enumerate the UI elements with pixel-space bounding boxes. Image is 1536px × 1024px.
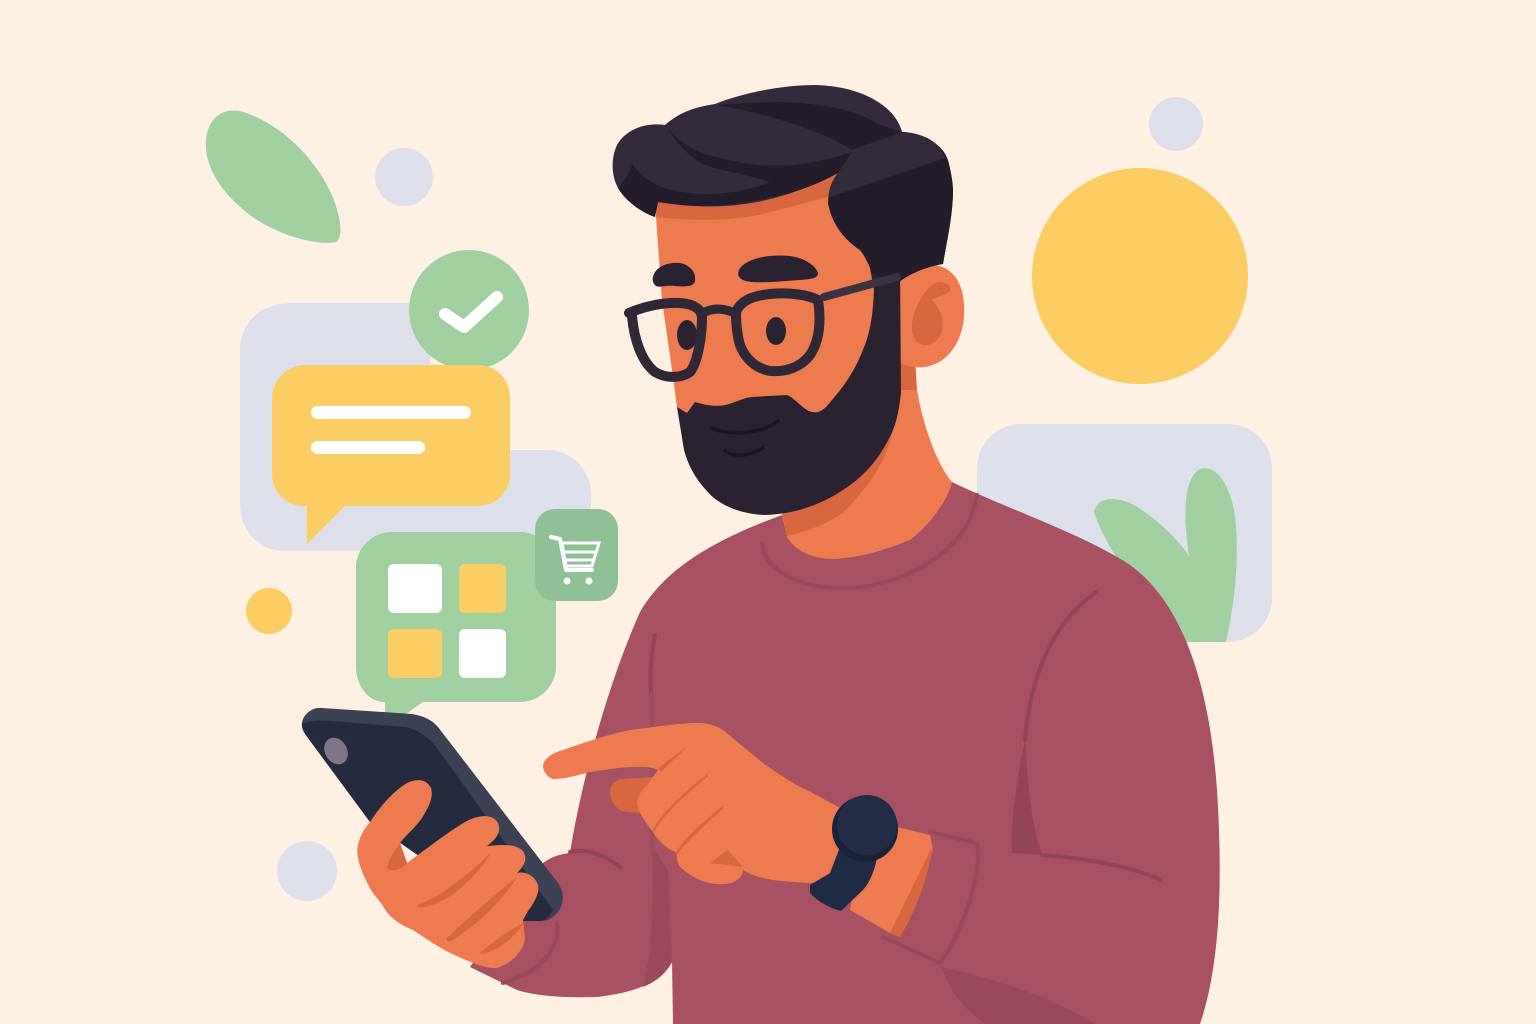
circle: lavender top right [1149, 97, 1203, 151]
pointing hand [543, 723, 845, 884]
panel: green app grid bubble [356, 532, 556, 716]
hair dark strands [618, 102, 953, 282]
panel: lavender back speech bubble [240, 303, 591, 551]
eyebrows [653, 256, 818, 287]
icon: green plant [1094, 468, 1237, 642]
circle: large yellow sun [1032, 168, 1248, 384]
circle: small yellow dot [246, 588, 292, 634]
neck shadow [782, 358, 917, 536]
eyes [677, 320, 697, 350]
hair [613, 85, 953, 282]
sweater body [470, 482, 1220, 1024]
phone [302, 708, 563, 921]
wrist [850, 827, 934, 937]
icon: green leaf top left [206, 110, 340, 243]
phone camera [319, 733, 353, 769]
face [656, 170, 878, 430]
figure: man [302, 85, 1220, 1024]
smartwatch [810, 795, 898, 911]
circle: lavender bottom left [277, 841, 337, 901]
beard [677, 268, 901, 515]
neck [782, 360, 952, 559]
icon: green check badge [409, 250, 529, 370]
circle: lavender top left [375, 148, 433, 206]
icon: shopping cart badge [535, 509, 618, 601]
panel: lavender rounded square with plant [977, 424, 1272, 642]
holding hand [357, 780, 538, 968]
sweater folds [643, 740, 1095, 1024]
panel: yellow chat bubble [272, 365, 510, 544]
glasses [629, 277, 897, 377]
ear [898, 265, 964, 367]
forehead shadow [656, 173, 838, 220]
mouth lines [711, 421, 778, 455]
sweater details [503, 495, 1160, 983]
